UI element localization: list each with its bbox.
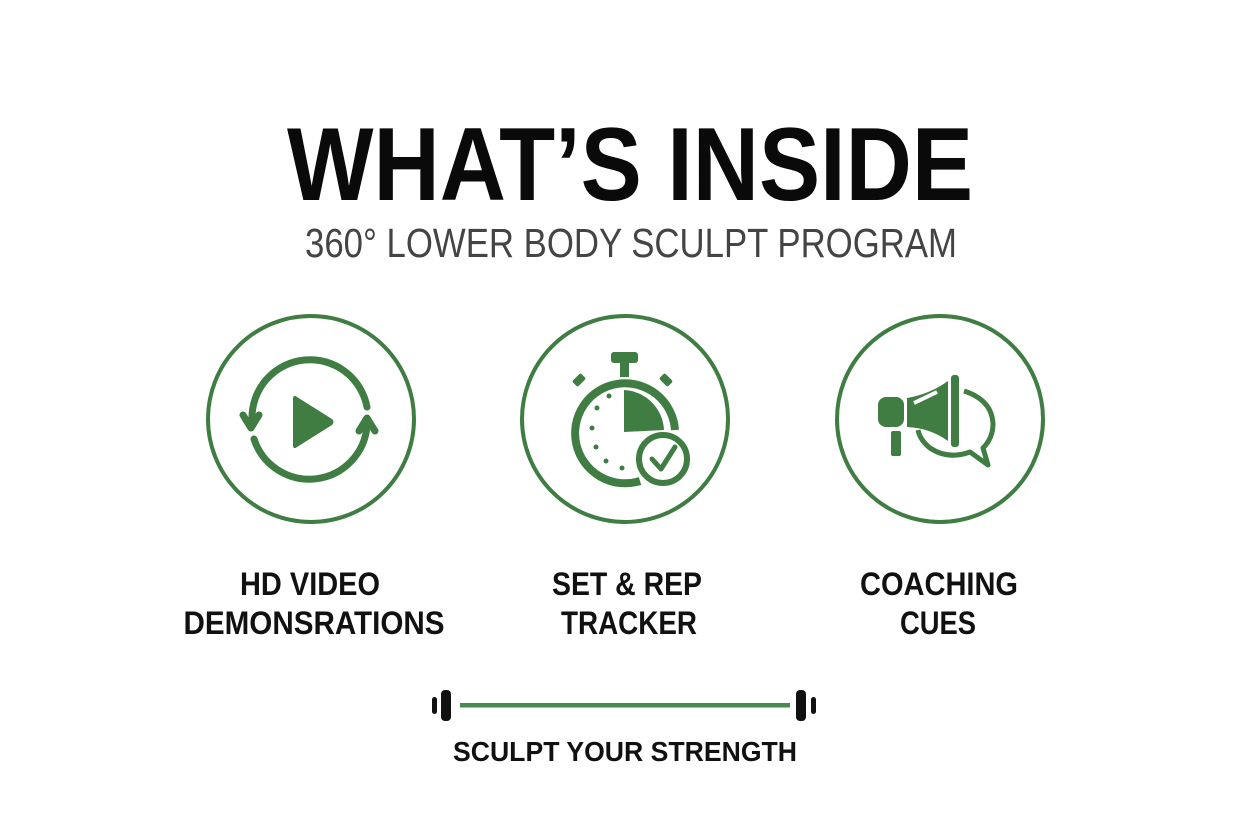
panel: coaching cues: CUES bbox=[900, 605, 976, 641]
panel: HD video: DEMONSRATIONS bbox=[184, 605, 444, 641]
icon circle: tracker bbox=[522, 316, 728, 522]
tagline: SCULPT YOUR STRENGTH bbox=[453, 736, 797, 767]
label: HD VIDEO bbox=[240, 566, 380, 602]
icon circle: video bbox=[208, 316, 414, 522]
title: WHAT’S INSIDE bbox=[287, 107, 973, 223]
panel: HD video bbox=[184, 316, 444, 641]
panel: set & rep tracker: TRACKER bbox=[561, 605, 697, 641]
label: SET & REP bbox=[552, 566, 702, 602]
icon circle: coaching bbox=[837, 316, 1043, 522]
barbell divider bbox=[432, 690, 816, 721]
icon: replay play bbox=[243, 360, 375, 479]
icon: megaphone speech bubble bbox=[918, 391, 993, 465]
icon: stopwatch with check bbox=[572, 352, 673, 470]
panel: set & rep tracker bbox=[522, 316, 728, 641]
subtitle: 360° LOWER BODY SCULPT PROGRAM bbox=[305, 220, 957, 266]
label: COACHING bbox=[860, 566, 1018, 602]
panel: coaching cues bbox=[837, 316, 1043, 641]
